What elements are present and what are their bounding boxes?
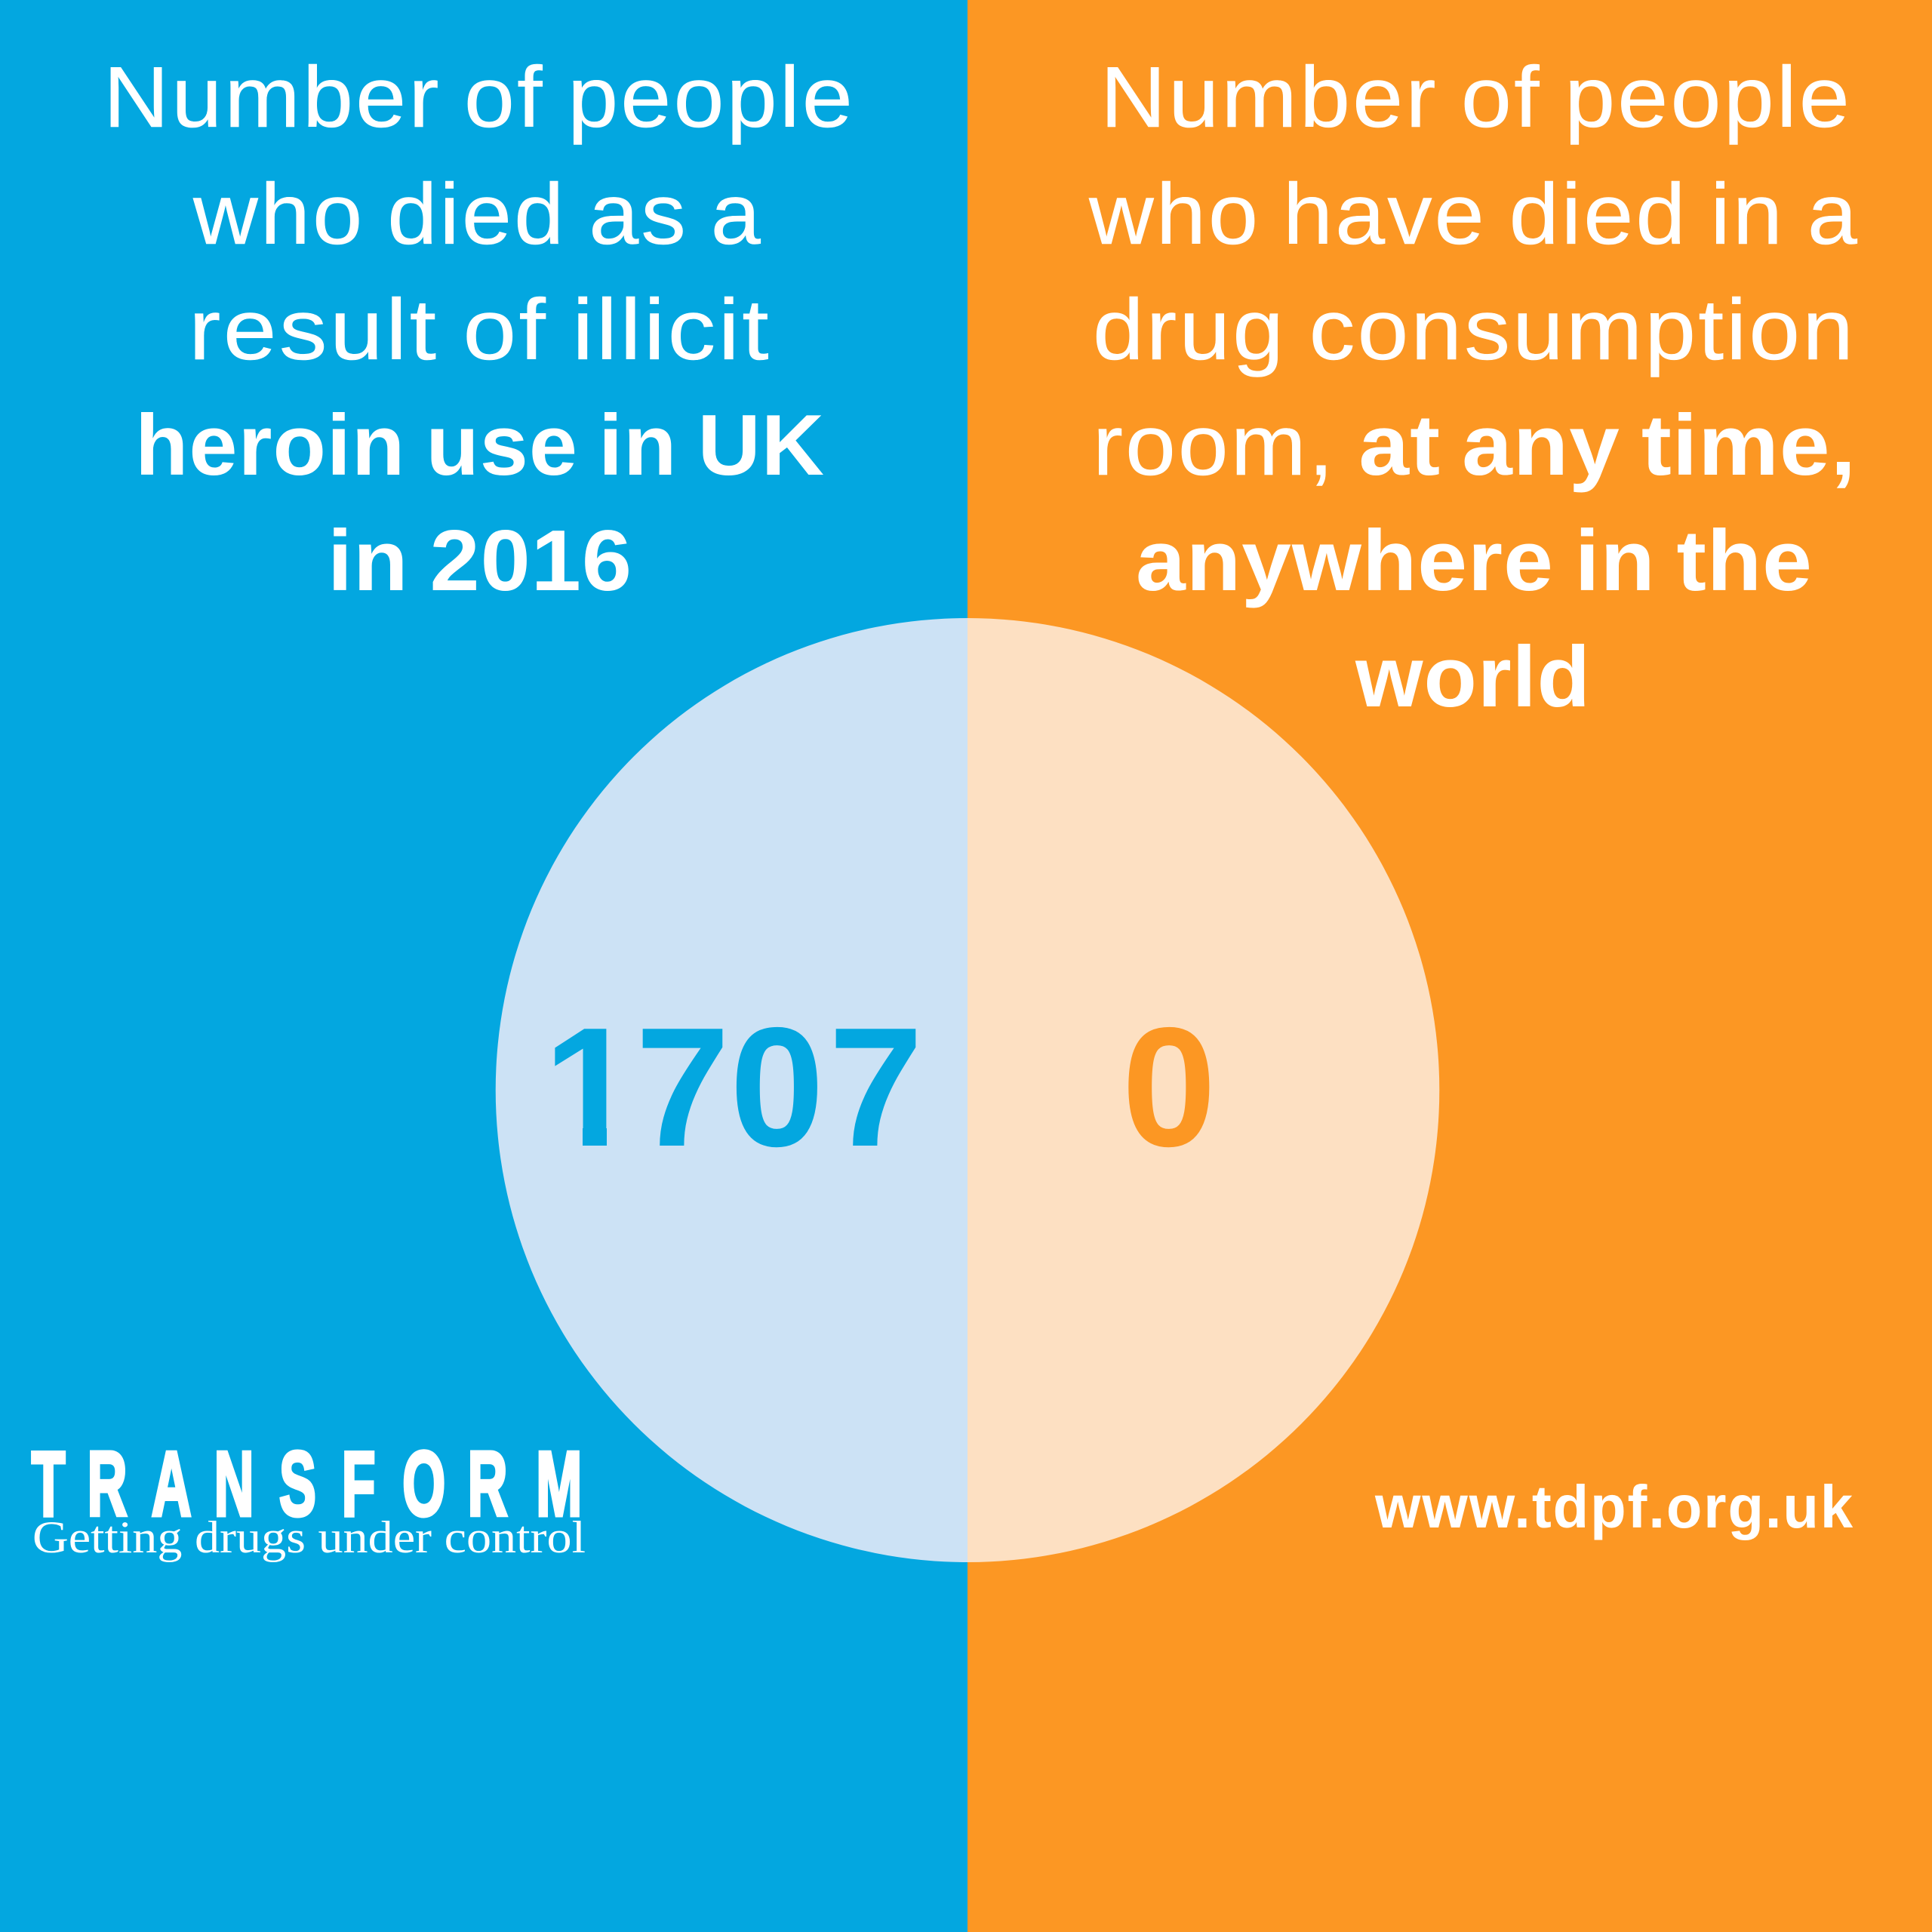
logo wordmark: TRANSFORM	[32, 1433, 582, 1536]
heading: right description: world	[1355, 629, 1591, 725]
logo tagline: Getting drugs under control	[32, 1512, 586, 1562]
panel: right orange background	[968, 0, 1932, 1932]
heading: left description: who died as a	[192, 167, 763, 263]
heading: right description: drug consumption	[1093, 282, 1856, 378]
website url: www.tdpf.org.uk	[1374, 1473, 1854, 1540]
heading: left description: in 2016	[328, 513, 632, 609]
circle: right half	[968, 618, 1439, 1562]
number: 0 consumption room deaths: 0	[1121, 992, 1217, 1182]
circle: split comparison	[496, 618, 1439, 1562]
logo: Transform	[32, 1433, 586, 1562]
circle: left half	[496, 618, 968, 1562]
panel: left blue background	[0, 0, 968, 1932]
number: 1707 heroin deaths: 1707	[543, 992, 923, 1182]
heading: left description: result of illicit	[189, 282, 771, 378]
heading: right description	[1088, 50, 1860, 725]
heading: left description	[103, 50, 855, 609]
heading: right description: room, at any time,	[1093, 398, 1857, 494]
heading: left description: Number of people	[103, 50, 855, 146]
heading: right description: Number of people	[1100, 50, 1852, 146]
heading: right description: who have died in a	[1088, 167, 1860, 263]
heading: left description: heroin use in UK	[135, 398, 825, 494]
heading: right description: anywhere in the	[1136, 513, 1813, 609]
